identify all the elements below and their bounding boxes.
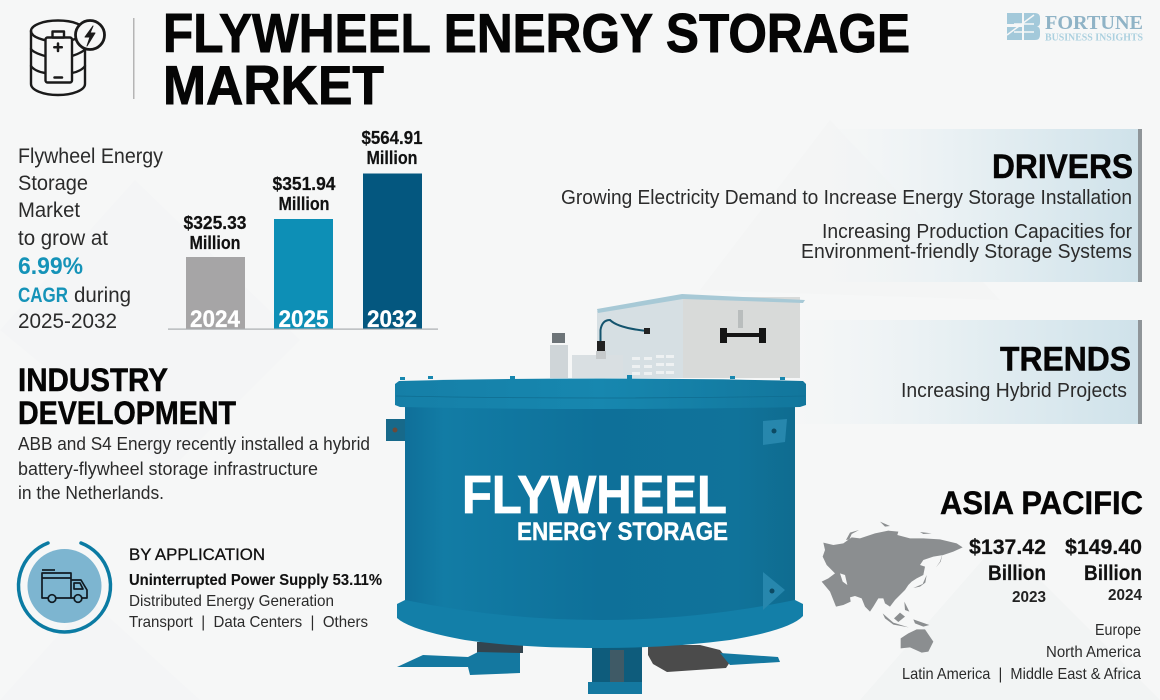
title: FLYWHEEL ENERGY STORAGE: [163, 2, 910, 64]
bar chart: [168, 128, 438, 333]
bottom flange: [397, 600, 803, 648]
other regions: Europe: [1095, 622, 1141, 639]
bar 2032: Million: [366, 148, 418, 168]
box: [550, 294, 805, 378]
panel: trends: Increasing Hybrid Projects: [901, 380, 1127, 402]
title: MARKET: [163, 54, 384, 116]
title: [163, 2, 910, 116]
panel: drivers: Increasing Production Capacities for: [822, 221, 1132, 243]
text: CAGR statement: [18, 144, 163, 333]
machine label: ENERGY STORAGE: [517, 518, 728, 546]
tank body: [405, 405, 795, 630]
logo: Fortune Business Insights: FORTUNE: [1045, 12, 1143, 34]
other regions: Latin America | Middle East & Africa: [902, 666, 1141, 683]
text: by application: BY APPLICATION: [129, 545, 265, 564]
value 2023: 2023: [1012, 589, 1046, 606]
text: industry development: [18, 362, 370, 503]
text: by application: Distributed Energy Generation: [129, 593, 334, 610]
panel: drivers: Environment-friendly Storage Systems: [801, 241, 1132, 263]
text: CAGR statement: Flywheel Energy: [18, 144, 163, 168]
other regions: North America: [1046, 644, 1141, 661]
text: by application: Uninterrupted Power Supply 53.11%: [129, 572, 382, 589]
value 2023: [969, 536, 1046, 606]
feet: [397, 642, 780, 694]
icon: truck in circle: [19, 543, 111, 632]
top flange: [395, 378, 806, 409]
bar 2024: Million: [190, 233, 240, 253]
bar 2032: $564.91: [362, 128, 422, 148]
value 2024: 2024: [1108, 587, 1142, 604]
panel: asia pacific: ASIA PACIFIC: [940, 485, 1143, 521]
text: by application: Transport | Data Centers | Others: [129, 614, 368, 631]
map: Asia Pacific: [822, 522, 963, 653]
bar 2025: Million: [278, 194, 330, 214]
brackets: [763, 419, 787, 445]
value 2024: Billion: [1084, 562, 1142, 585]
text: CAGR statement: to grow at: [18, 226, 108, 250]
panel: trends: [780, 320, 1142, 424]
value 2023: Billion: [988, 562, 1046, 585]
bar 2024: [184, 213, 246, 333]
panel: drivers: [561, 129, 1142, 282]
other regions: [902, 622, 1141, 683]
logo: Fortune Business Insights: BUSINESS INSIGHTS: [1045, 32, 1143, 44]
text: CAGR statement: Storage: [18, 171, 88, 195]
divider line: [133, 18, 134, 99]
text: industry development: INDUSTRY: [18, 362, 168, 398]
panel: drivers: Growing Electricity Demand to Increase Energy Storage Installation: [561, 187, 1132, 209]
bar 2025: 2025: [278, 306, 328, 333]
text: CAGR statement: during: [74, 283, 131, 307]
text: industry development: DEVELOPMENT: [18, 395, 236, 431]
machine label: FLYWHEEL: [462, 465, 727, 525]
value 2024: $149.40: [1065, 536, 1142, 559]
text: industry development: in the Netherlands.: [18, 483, 164, 503]
bar 2024: $325.33: [184, 213, 246, 233]
panel: trends: TRENDS: [1000, 340, 1131, 378]
bar 2025: [272, 174, 336, 333]
value 2023: $137.42: [969, 536, 1046, 559]
text: CAGR statement: 2025-2032: [18, 309, 117, 333]
text: by application: [129, 545, 382, 631]
logo: Fortune Business Insights: [1007, 12, 1143, 44]
text: CAGR statement: Market: [18, 198, 80, 222]
value 2024: [1065, 536, 1142, 604]
icon: battery database: [31, 20, 104, 95]
bar 2025: $351.94: [272, 174, 336, 194]
bar 2032: 2032: [367, 306, 417, 333]
text: industry development: ABB and S4 Energy recently installed a hybrid: [18, 434, 370, 454]
machine label: [462, 465, 728, 546]
text: industry development: battery-flywheel storage infrastructure: [18, 459, 318, 479]
text: CAGR statement: 6.99%: [18, 253, 83, 280]
panel: drivers: DRIVERS: [992, 148, 1133, 186]
panel: asia pacific: [822, 485, 1143, 683]
flywheel machine illustration: [386, 294, 806, 694]
bar 2032: [362, 128, 422, 333]
bar 2024: 2024: [190, 306, 241, 333]
text: CAGR statement: CAGR: [18, 283, 68, 307]
